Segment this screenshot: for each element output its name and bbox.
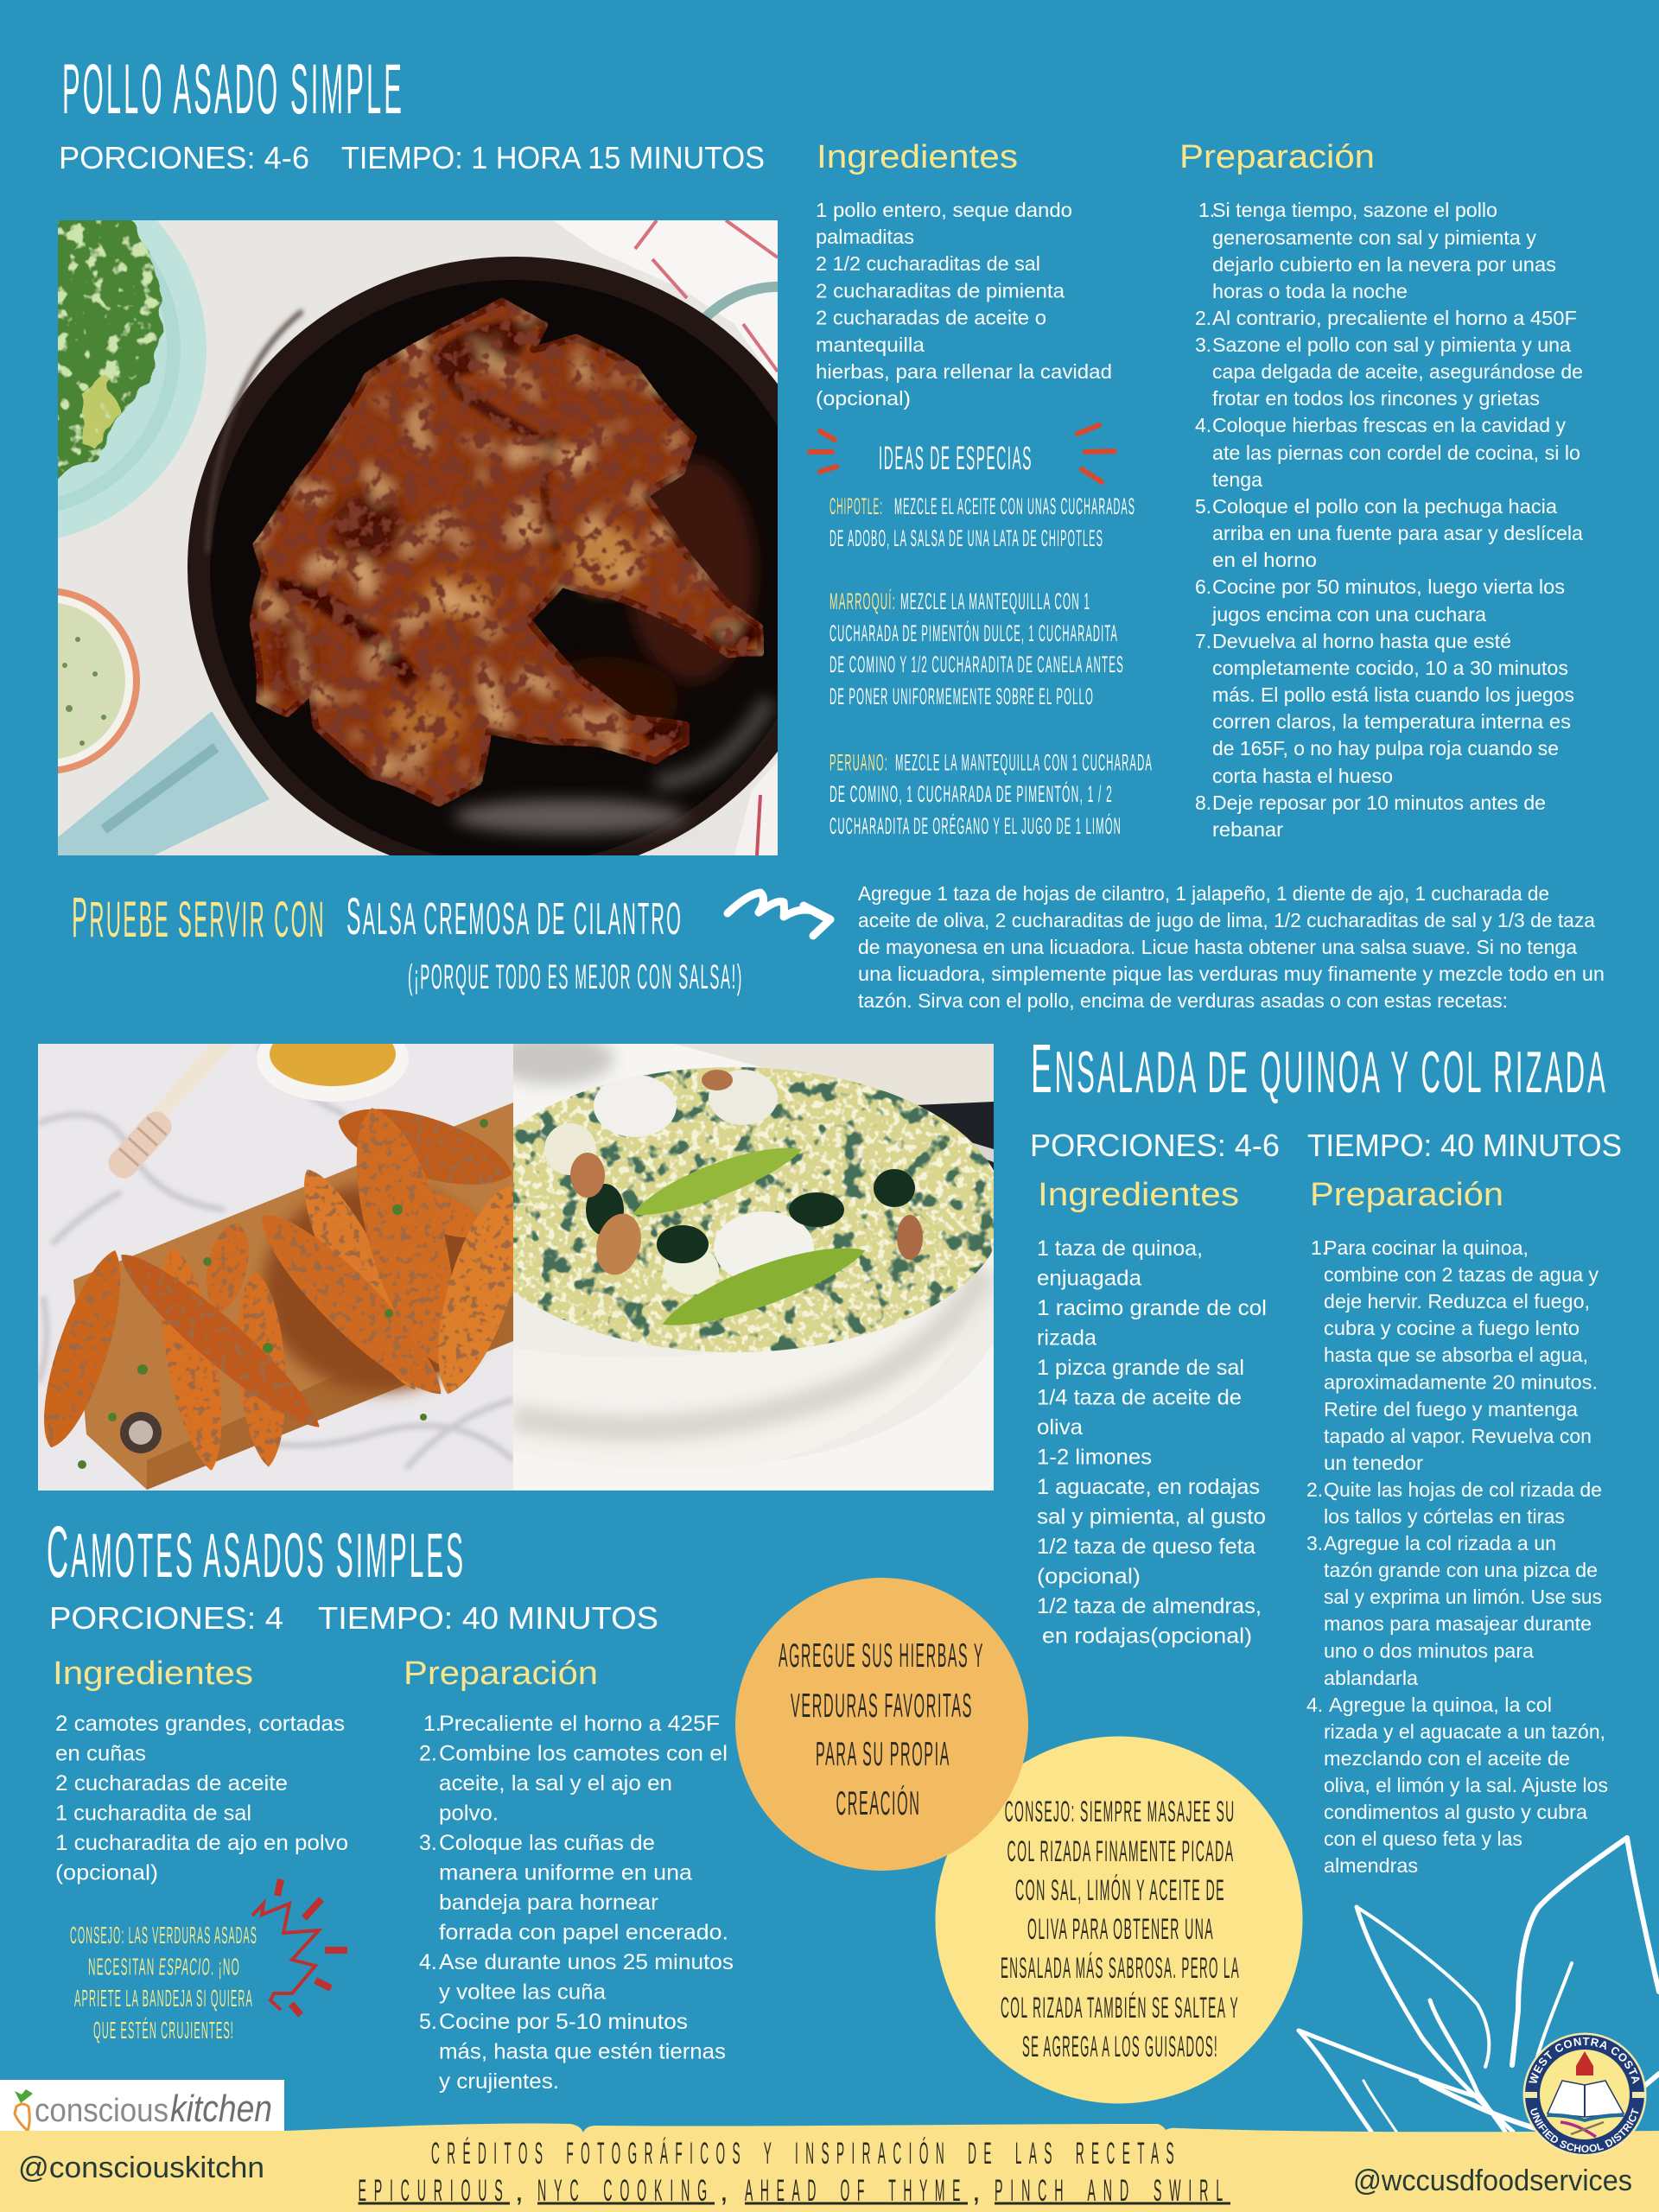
salsa recipe text: Agregue 1 taza de hojas de cilantro, 1 jalapeño, 1 diente de ajo, 1 cucharada de bbox=[858, 882, 1549, 905]
spice ideas text: MEZCLE LA MANTEQUILLA CON 1 bbox=[900, 588, 1090, 614]
servings and time: TIEMPO: 1 HORA 15 MINUTOS bbox=[341, 140, 765, 175]
spice ideas text: DE PONER UNIFORMEMENTE SOBRE EL POLLO bbox=[830, 683, 1094, 709]
logo: west contra costa unified school district seal: WEST CONTRA COSTA bbox=[1529, 2037, 1640, 2084]
ingredient list: 1 pizca grande de sal bbox=[1037, 1356, 1244, 1380]
preparation steps: 5. bbox=[1195, 495, 1211, 518]
panel: pollo asado recipe bbox=[0, 50, 1583, 879]
panel: salsa serving suggestion bbox=[72, 882, 1605, 1012]
preparation steps: arriba en una fuente para asar y deslícela bbox=[1212, 522, 1583, 544]
preparation steps: de 165F, o no hay pulpa roja cuando se bbox=[1212, 737, 1559, 760]
photo: kale and quinoa salad bowl bbox=[513, 1044, 994, 1491]
ingredient list bbox=[55, 1712, 348, 1885]
preparation steps: corta hasta el hueso bbox=[1212, 765, 1393, 787]
salsa recipe text: tazón. Sirva con el pollo, encima de verduras asadas o con estas recetas: bbox=[858, 989, 1508, 1012]
ingredient list: 1 cucharadita de sal bbox=[55, 1801, 251, 1825]
preparation steps: 1. bbox=[423, 1712, 442, 1736]
preparation steps bbox=[419, 1712, 734, 2094]
callout: orange circle: PARA SU PROPIA bbox=[816, 1736, 950, 1773]
photo credits: , bbox=[515, 2174, 526, 2208]
spice ideas text: MARROQUÍ: bbox=[830, 588, 896, 614]
preparation steps: mezclando con el aceite de bbox=[1324, 1747, 1570, 1770]
preparation steps: sal y exprima un limón. Use sus bbox=[1324, 1586, 1602, 1608]
ingredient list: mantequilla bbox=[816, 334, 925, 356]
spice ideas text: PERUANO: bbox=[830, 750, 888, 776]
preparation steps: completamente cocido, 10 a 30 minutos bbox=[1212, 657, 1568, 679]
preparation steps: Quite las hojas de col rizada de bbox=[1324, 1478, 1602, 1501]
heading: ingredientes: Ingredientes bbox=[53, 1656, 253, 1692]
panel: camotes recipe: CAMOTES ASADOS SIMPLES bbox=[47, 1511, 466, 1592]
preparation steps bbox=[1195, 199, 1583, 841]
decorative leaves bbox=[1299, 1838, 1659, 2132]
photo credits: EPICURIOUS bbox=[358, 2174, 510, 2208]
photo credits: AHEAD OF THYME bbox=[745, 2174, 968, 2208]
text: AGREGUE SUS HIERBAS Y bbox=[779, 1637, 984, 1675]
callout: yellow circle tip bbox=[935, 1737, 1303, 2103]
photo credits: , bbox=[972, 2174, 983, 2208]
servings and time: TIEMPO: 40 MINUTOS bbox=[318, 1600, 658, 1636]
ingredient list: sal y pimienta, al gusto bbox=[1037, 1505, 1266, 1529]
icon: red zigzag burst bbox=[252, 1879, 347, 2015]
preparation steps: Para cocinar la quinoa, bbox=[1324, 1236, 1529, 1259]
ingredient list: 1/2 taza de queso feta bbox=[1037, 1535, 1255, 1559]
preparation steps: forrada con papel encerado. bbox=[439, 1920, 728, 1944]
tip: roasted vegetables need space: NECESITAN ESPACIO. ¡NO bbox=[88, 1953, 240, 1980]
heading: ingredientes: Ingredientes bbox=[817, 139, 1018, 175]
preparation steps: capa delgada de aceite, asegurándose de bbox=[1212, 360, 1583, 383]
salsa recipe text bbox=[858, 882, 1605, 1012]
servings and time: PORCIONES: 4-6 bbox=[1030, 1128, 1280, 1163]
salsa recipe text: una licuadora, simplemente pique las verduras muy finamente y mezcle todo en un bbox=[858, 963, 1605, 985]
panel: pollo asado recipe: CUCHARADA DE PIMENTÓN DULCE, 1 CUCHARADITA bbox=[830, 620, 1118, 646]
preparation steps: Ase durante unos 25 minutos bbox=[439, 1950, 734, 1974]
ingredients column bbox=[816, 139, 1112, 410]
preparation steps: rizada y el aguacate a un tazón, bbox=[1324, 1720, 1605, 1743]
preparation steps: generosamente con sal y pimienta y bbox=[1212, 226, 1537, 249]
preparation steps: bandeja para hornear bbox=[439, 1891, 658, 1915]
preparation steps: Coloque las cuñas de bbox=[439, 1831, 655, 1855]
panel: pollo asado recipe: CUCHARADITA DE ORÉGANO Y EL JUGO DE 1 LIMÓN bbox=[830, 812, 1122, 839]
tip: roasted vegetables need space bbox=[70, 1922, 257, 2044]
preparation steps: Agregue la col rizada a un bbox=[1324, 1532, 1556, 1554]
preparation steps: Precaliente el horno a 425F bbox=[439, 1712, 720, 1736]
preparation steps: hasta que se absorba el agua, bbox=[1324, 1344, 1588, 1366]
preparation steps: deje hervir. Reduzca el fuego, bbox=[1324, 1290, 1590, 1313]
preparation steps: rebanar bbox=[1212, 818, 1283, 841]
ingredient list: 2 cucharadas de aceite o bbox=[816, 306, 1046, 328]
ingredient list: oliva bbox=[1037, 1415, 1083, 1440]
ingredient list: en rodajas(opcional) bbox=[1042, 1624, 1252, 1649]
preparation steps: un tenedor bbox=[1324, 1452, 1423, 1474]
preparation steps: Coloque el pollo con la pechuga hacia bbox=[1212, 495, 1557, 518]
panel: camotes recipe: QUE ESTÉN CRUJIENTES! bbox=[93, 2017, 234, 2044]
heading with red sparks: ideas de especias bbox=[810, 425, 1115, 482]
preparation steps bbox=[1306, 1236, 1608, 1877]
preparation steps: corren claros, la temperatura interna es bbox=[1212, 710, 1571, 733]
ingredient list: 2 1/2 cucharaditas de sal bbox=[816, 252, 1040, 275]
ingredient list: 1-2 limones bbox=[1037, 1445, 1152, 1469]
preparation steps: 7. bbox=[1195, 630, 1211, 652]
heading with red sparks: ideas de especias: IDEAS DE ESPECIAS bbox=[879, 441, 1033, 477]
servings and time bbox=[49, 1600, 658, 1636]
logo: west contra costa unified school district seal: UNIFIED SCHOOL DISTRICT bbox=[1531, 2108, 1638, 2153]
preparation steps: ate las piernas con cordel de cocina, si lo bbox=[1212, 442, 1580, 464]
ingredient list: enjuagada bbox=[1037, 1267, 1141, 1291]
spice ideas text: DE COMINO, 1 CUCHARADA DE PIMENTÓN, 1 / 2 bbox=[830, 780, 1113, 807]
ingredient list bbox=[816, 199, 1112, 410]
panel: camotes recipe: APRIETE LA BANDEJA SI QUIERA bbox=[74, 1985, 253, 2012]
photo: roasted sweet potato wedges on board bbox=[38, 1044, 513, 1491]
preparation steps: dejarlo cubierto en la nevera por unas bbox=[1212, 253, 1556, 276]
preparation steps: 4. bbox=[1195, 414, 1211, 436]
ingredient list: en cuñas bbox=[55, 1742, 146, 1766]
preparation steps: Si tenga tiempo, sazone el pollo bbox=[1212, 199, 1497, 221]
conscious kitchen logo bbox=[0, 2080, 284, 2133]
preparation steps: aproximadamente 20 minutos. bbox=[1324, 1370, 1598, 1393]
preparation steps: aceite, la sal y el ajo en bbox=[439, 1771, 672, 1796]
photo: roast chicken in skillet bbox=[58, 220, 778, 855]
preparation steps: 3. bbox=[1195, 334, 1211, 356]
preparation steps: 3. bbox=[419, 1831, 437, 1855]
preparation steps: y crujientes. bbox=[439, 2069, 559, 2094]
spice ideas text bbox=[830, 493, 1153, 839]
preparation steps: 4. bbox=[419, 1950, 437, 1974]
panel: camotes recipe bbox=[47, 1511, 734, 2094]
callout: yellow circle tip: CONSEJO: SIEMPRE MASAJEE SU bbox=[1005, 1796, 1236, 1828]
preparation steps: cubra y cocine a fuego lento bbox=[1324, 1317, 1580, 1339]
preparation steps: jugos encima con una cuchara bbox=[1211, 603, 1486, 626]
heading: preparación: Preparación bbox=[1310, 1177, 1503, 1213]
panel: salsa serving suggestion: (¡PORQUE TODO ES MEJOR CON SALSA!) bbox=[408, 958, 743, 996]
salsa recipe text: de mayonesa en una licuadora. Licue hasta obtener una salsa suave. Si no tenga bbox=[858, 936, 1577, 958]
preparation steps: 1. bbox=[1311, 1236, 1327, 1259]
ingredient list: 2 camotes grandes, cortadas bbox=[55, 1712, 345, 1736]
preparation steps: manera uniforme en una bbox=[439, 1861, 692, 1885]
preparation steps: uno o dos minutos para bbox=[1324, 1640, 1534, 1662]
icon: squiggle arrow bbox=[728, 893, 830, 936]
preparation steps: horas o toda la noche bbox=[1212, 280, 1408, 302]
servings and time bbox=[59, 140, 765, 175]
preparation steps: los tallos y córtelas en tiras bbox=[1324, 1505, 1565, 1528]
ingredient list: 1 pollo entero, seque dando bbox=[816, 199, 1072, 221]
panel: pollo asado recipe: MEZCLE LA MANTEQUILLA CON 1 CUCHARADA bbox=[895, 750, 1153, 776]
heading: ingredientes: Ingredientes bbox=[1038, 1177, 1239, 1213]
photo credits bbox=[358, 2137, 1230, 2208]
salsa recipe text: aceite de oliva, 2 cucharaditas de jugo de lima, 1/2 cucharaditas de sal y 1/3 de taza bbox=[858, 909, 1595, 931]
preparation steps: 5. bbox=[419, 2010, 437, 2034]
preparation steps: en el horno bbox=[1212, 549, 1317, 571]
servings and time: PORCIONES: 4 bbox=[49, 1600, 283, 1636]
preparation steps: Combine los camotes con el bbox=[439, 1742, 728, 1766]
preparation steps: Al contrario, precaliente el horno a 450F bbox=[1212, 307, 1577, 329]
preparation steps: Cocine por 50 minutos, luego vierta los bbox=[1212, 575, 1565, 598]
panel: camotes recipe: CONSEJO: LAS VERDURAS ASADAS bbox=[70, 1922, 257, 1948]
callout: yellow circle tip: CON SAL, LIMÓN Y ACEITE DE bbox=[1015, 1874, 1225, 1907]
callout: orange circle bbox=[735, 1578, 1028, 1871]
preparation steps: tapado al vapor. Revuelva con bbox=[1324, 1425, 1592, 1447]
conscious kitchen logo: conscious bbox=[35, 2093, 168, 2129]
preparation steps: 1. bbox=[1198, 199, 1215, 221]
callout: yellow circle tip: SE AGREGA A LOS GUISADOS! bbox=[1022, 2031, 1218, 2063]
handle: wccusdfoodservices: @wccusdfoodservices bbox=[1353, 2164, 1632, 2197]
ingredient list: 1 taza de quinoa, bbox=[1037, 1236, 1203, 1261]
ingredient list: 2 cucharaditas de pimienta bbox=[816, 280, 1065, 302]
preparation steps: oliva, el limón y la sal. Ajuste los bbox=[1324, 1774, 1608, 1796]
photo credits: NYC COOKING bbox=[537, 2174, 715, 2208]
logo: west contra costa unified school district seal bbox=[1522, 2032, 1647, 2157]
panel: pollo asado recipe: DE COMINO Y 1/2 CUCHARADITA DE CANELA ANTES bbox=[830, 652, 1124, 677]
preparation steps: 3. bbox=[1306, 1532, 1323, 1554]
servings and time bbox=[1030, 1128, 1622, 1163]
spice ideas text: CHIPOTLE: bbox=[830, 493, 883, 519]
heading: preparación: Preparación bbox=[1179, 139, 1375, 175]
heading: preparación: Preparación bbox=[404, 1656, 598, 1692]
ingredient list: hierbas, para rellenar la cavidad bbox=[816, 360, 1112, 383]
callout: yellow circle tip: COL RIZADA TAMBIÉN SE SALTEA Y bbox=[1001, 1992, 1239, 2024]
preparation steps: 2. bbox=[1306, 1478, 1323, 1501]
footer band bbox=[0, 2124, 1659, 2212]
servings and time: PORCIONES: 4-6 bbox=[59, 140, 309, 175]
preparation steps: polvo. bbox=[439, 1801, 499, 1825]
ingredient list bbox=[1037, 1236, 1267, 1649]
preparation steps: Cocine por 5-10 minutos bbox=[439, 2010, 688, 2034]
preparation steps: 8. bbox=[1195, 791, 1211, 814]
ingredient list: 1 racimo grande de col bbox=[1037, 1296, 1267, 1320]
preparation column bbox=[1179, 139, 1583, 841]
preparation steps: y voltee las cuña bbox=[439, 1980, 606, 2005]
callout: orange circle: CREACIÓN bbox=[836, 1785, 921, 1822]
preparation steps: más, hasta que estén tiernas bbox=[439, 2039, 726, 2063]
preparation steps: Coloque hierbas frescas en la cavidad y bbox=[1212, 414, 1566, 436]
preparation steps: frotar en todos los rincones y grietas bbox=[1212, 387, 1540, 410]
ingredient list: (opcional) bbox=[55, 1861, 158, 1885]
servings and time: TIEMPO: 40 MINUTOS bbox=[1307, 1128, 1622, 1163]
preparation steps: Sazone el pollo con sal y pimienta y una bbox=[1212, 334, 1571, 356]
footer band: PINCH AND SWIRL bbox=[995, 2174, 1230, 2208]
photo credits: , bbox=[720, 2174, 731, 2208]
ingredient list: (opcional) bbox=[816, 387, 911, 410]
ingredient list: palmaditas bbox=[816, 226, 914, 248]
ingredient list: 1/2 taza de almendras, bbox=[1037, 1594, 1262, 1618]
preparation steps: más. El pollo está lista cuando los juegos bbox=[1212, 683, 1574, 706]
preparation steps: tazón grande con una pizca de bbox=[1324, 1559, 1598, 1581]
preparation steps: Deje reposar por 10 minutos antes de bbox=[1212, 791, 1546, 814]
preparation steps: almendras bbox=[1324, 1854, 1418, 1877]
panel: salsa serving suggestion: PRUEBE SERVIR CON bbox=[72, 885, 326, 949]
callout: yellow circle tip: COL RIZADA FINAMENTE PICADA bbox=[1007, 1835, 1234, 1868]
text: ENSALADA MÁS SABROSA. PERO LA bbox=[1001, 1952, 1240, 1985]
panel: pollo asado recipe: MEZCLE EL ACEITE CON UNAS CUCHARADAS bbox=[894, 493, 1135, 519]
ingredient list: rizada bbox=[1037, 1325, 1096, 1350]
panel: salsa serving suggestion: SALSA CREMOSA DE CILANTRO bbox=[346, 887, 683, 945]
preparation steps: 2. bbox=[1195, 307, 1211, 329]
panel: pollo asado recipe: DE ADOBO, LA SALSA DE UNA LATA DE CHIPOTLES bbox=[830, 525, 1103, 551]
preparation steps: Devuelva al horno hasta que esté bbox=[1212, 630, 1511, 652]
preparation steps: condimentos al gusto y cubra bbox=[1324, 1801, 1587, 1823]
preparation steps: ablandarla bbox=[1324, 1667, 1418, 1689]
preparation steps: 2. bbox=[419, 1742, 437, 1766]
preparation steps: manos para masajear durante bbox=[1324, 1612, 1592, 1635]
panel: pollo asado recipe: POLLO ASADO SIMPLE bbox=[62, 50, 404, 129]
ingredient list: 1 aguacate, en rodajas bbox=[1037, 1475, 1260, 1499]
callout: yellow circle tip: OLIVA PARA OBTENER UNA bbox=[1027, 1913, 1214, 1946]
callout: orange circle: VERDURAS FAVORITAS bbox=[791, 1688, 973, 1725]
preparation steps: con el queso feta y las bbox=[1324, 1827, 1522, 1850]
ingredient list: (opcional) bbox=[1037, 1564, 1141, 1588]
panel: ensalada recipe bbox=[1030, 1030, 1622, 1877]
preparation steps: 6. bbox=[1195, 575, 1211, 598]
ingredient list: 2 cucharadas de aceite bbox=[55, 1771, 288, 1796]
conscious kitchen logo: kitchen bbox=[170, 2088, 272, 2130]
preparation steps: combine con 2 tazas de agua y bbox=[1324, 1263, 1599, 1286]
preparation steps: tenga bbox=[1212, 468, 1262, 491]
ingredient list: 1 cucharadita de ajo en polvo bbox=[55, 1831, 348, 1855]
ingredient list: 1/4 taza de aceite de bbox=[1037, 1386, 1242, 1410]
preparation steps: 4. bbox=[1306, 1694, 1323, 1716]
handle: consciouskitchn: @consciouskitchn bbox=[18, 2152, 264, 2184]
preparation steps: Agregue la quinoa, la col bbox=[1329, 1694, 1552, 1716]
preparation steps: Retire del fuego y mantenga bbox=[1324, 1398, 1578, 1421]
